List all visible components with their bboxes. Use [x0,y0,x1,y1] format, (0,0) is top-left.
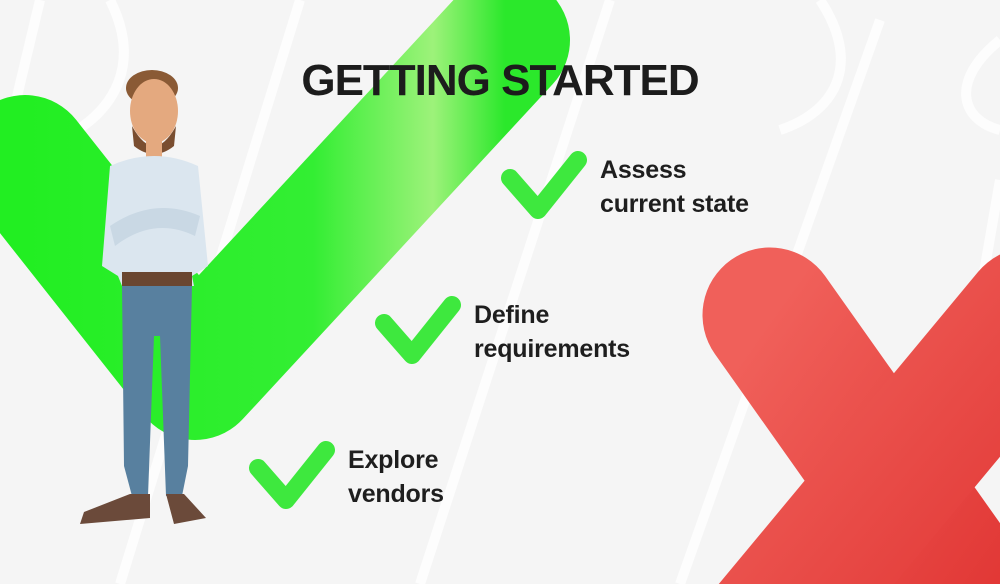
icon: check 2 [375,296,461,364]
text: assess: current state [600,190,749,218]
item 3 [249,441,444,509]
text: assess: Assess [600,156,686,184]
text: explore: vendors [348,480,444,508]
text: assess [600,156,749,218]
red X [760,315,1000,584]
big green check [25,40,505,375]
text: define: requirements [474,335,630,363]
text: define: Define [474,301,549,329]
text: define [474,301,630,363]
icon: check 3 [249,441,335,509]
item 2 [375,296,630,364]
icon: check 1 [501,151,587,219]
item 1 [501,151,749,219]
text: explore [348,446,444,508]
text: explore: Explore [348,446,438,474]
title: GETTING STARTED [301,56,699,105]
person illustration [80,70,208,524]
